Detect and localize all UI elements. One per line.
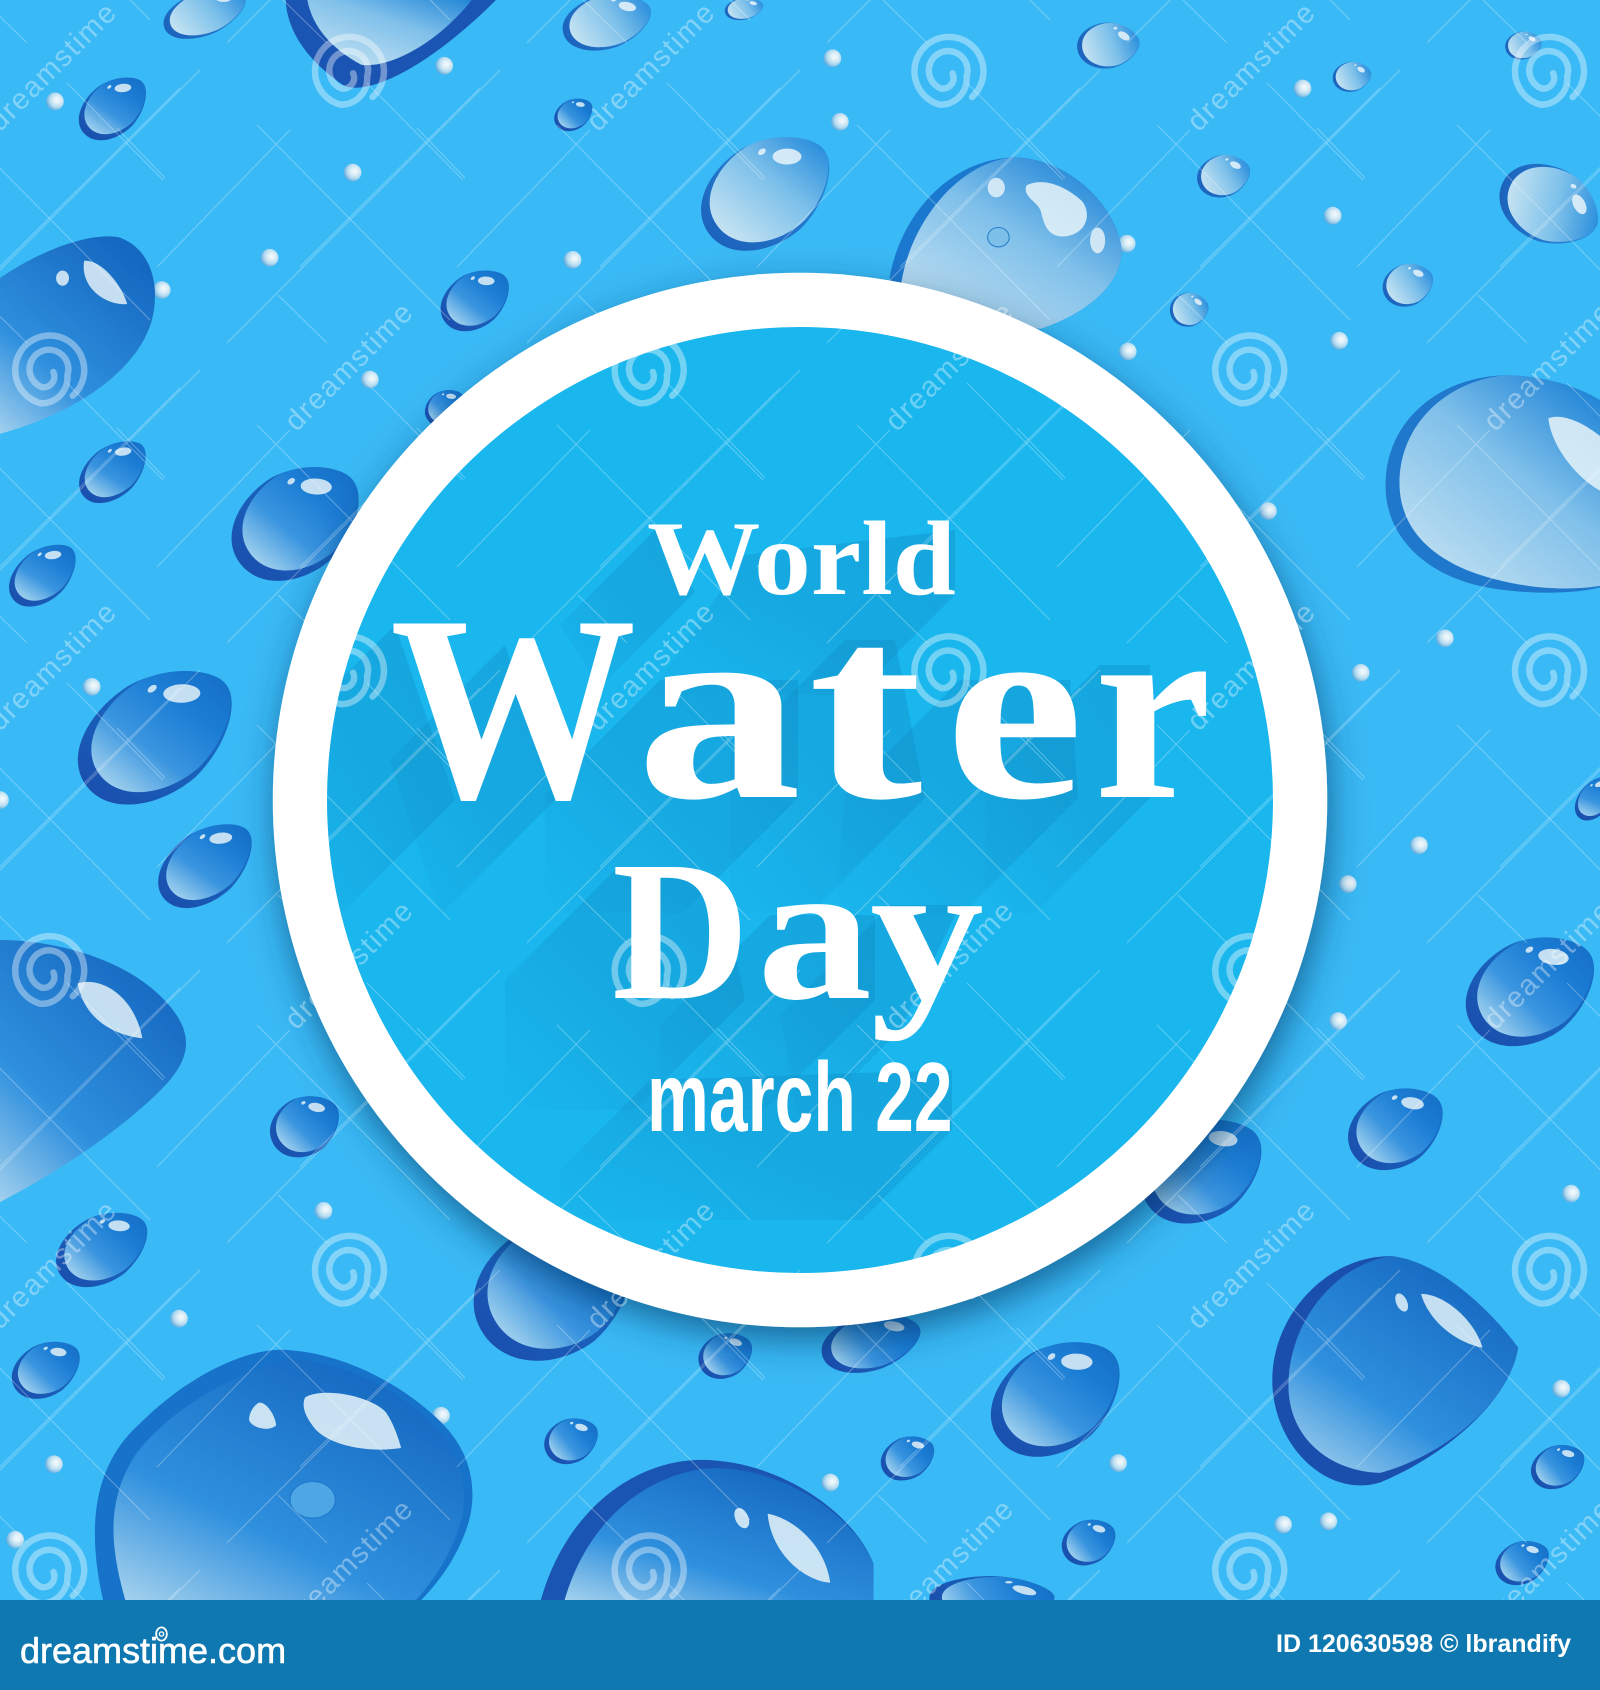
title: Water: W — [390, 562, 636, 855]
watermark overlay: crosses, spirals, dreamstime text: dreamstime — [279, 1493, 420, 1634]
large drop: bottom right — [1272, 1256, 1518, 1485]
title: Water: t — [808, 562, 923, 855]
large drop: bottom centre — [539, 1460, 873, 1607]
watermark overlay: crosses, spirals, dreamstime text: dreamstime — [581, 596, 722, 737]
watermark overlay: crosses, spirals, dreamstime text: dreamstime — [279, 296, 420, 437]
footer image credit: ID 120630598 © lbrandify — [1276, 1630, 1571, 1658]
title: Water: a — [636, 562, 802, 855]
footer bar — [0, 1600, 1600, 1690]
title: World: World — [647, 500, 956, 617]
title: Day: a — [757, 821, 872, 1042]
large drop: right edge — [1385, 375, 1600, 593]
watermark overlay: crosses, spirals, dreamstime text: dreamstime — [1181, 1194, 1323, 1336]
watermark overlay: crosses, spirals, dreamstime text: dreamstime — [581, 0, 722, 138]
title: Day: D — [612, 821, 749, 1042]
footer logo text: dreamstime.com — [20, 1630, 286, 1671]
large drop: bottom left — [95, 1350, 472, 1607]
watermark overlay: crosses, spirals, dreamstime text: dreamstime — [581, 1194, 722, 1336]
date: march 22: march 22 — [647, 1042, 953, 1152]
watermark overlay: crosses, spirals, dreamstime text: dreamstime — [879, 894, 1021, 1036]
watermark overlay: crosses, spirals, dreamstime text: dreamstime — [279, 894, 420, 1036]
title: Water: r — [1094, 562, 1212, 855]
large drop: behind ring top — [890, 157, 1121, 329]
large drop: left upper — [0, 236, 155, 437]
watermark overlay: crosses, spirals, dreamstime text: dreamstime — [879, 1493, 1021, 1634]
white ring — [273, 273, 1327, 1327]
title: Day — [612, 821, 984, 1042]
watermark overlay: crosses, spirals, dreamstime text: dreamstime — [1181, 0, 1323, 138]
watermark overlay: crosses, spirals, dreamstime text: dreamstime — [1181, 596, 1323, 737]
central disc with title text — [327, 327, 1273, 1273]
watermark overlay: crosses, spirals, dreamstime text: dreamstime — [879, 296, 1021, 437]
icon: footer logo spiral — [155, 1626, 168, 1642]
large drop: top centre-left — [285, 0, 496, 88]
title: Day: y — [870, 821, 984, 1042]
title: Water: e — [945, 562, 1084, 855]
large drop: left lower — [0, 940, 186, 1208]
title: Water — [390, 562, 1212, 855]
